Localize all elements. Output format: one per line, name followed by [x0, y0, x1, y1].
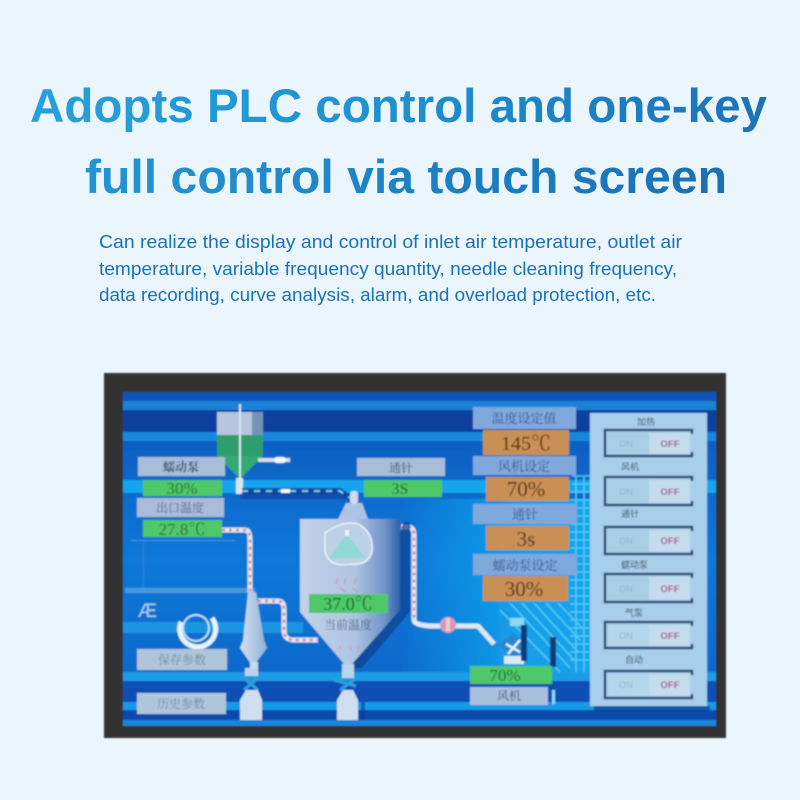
label: needle setting [473, 504, 577, 524]
button: history parameters: 历史参数 [157, 696, 205, 711]
title line 2: full control via touch screen [85, 150, 727, 203]
button: history parameters [137, 693, 226, 714]
label: peristaltic pump: 蠕动泵 [163, 459, 199, 474]
value: 30% [143, 479, 222, 498]
icon: collection containers [240, 664, 365, 720]
icon: AE logo ring: Æ [138, 601, 157, 622]
value: fan 70% [470, 666, 552, 685]
icon: AE logo ring [138, 601, 216, 647]
switch: needle: OFF [660, 536, 680, 547]
label: fan setpoint: 风机设定 [498, 459, 550, 474]
cyan hatch grid [500, 476, 590, 672]
description text block [99, 232, 682, 305]
switch: needle: ON [619, 536, 633, 546]
switch: needle: 通针 [621, 508, 639, 519]
switch: fan [605, 461, 692, 505]
pipes [222, 527, 494, 644]
value: 3S [364, 480, 442, 498]
label: needle setting: 通针 [512, 507, 538, 522]
icon: feed hopper [217, 404, 290, 494]
switch: pump: 蠕动泵 [621, 560, 648, 570]
switch: pump: OFF [660, 584, 680, 595]
switch: needle [605, 508, 692, 554]
switch: auto: OFF [660, 680, 680, 691]
switch: heating [605, 416, 692, 456]
label: chamber temperature: 当前温度 [324, 617, 372, 632]
label: pump setpoint: 蠕动泵设定 [492, 558, 558, 573]
value: 70%: 70% [507, 477, 545, 501]
value: 37.0C: 37.0℃ [323, 594, 373, 614]
label: temperature setpoint: 温度设定值 [491, 411, 557, 426]
icon: spray drying vessel [300, 491, 410, 668]
value: 30%: 30% [505, 577, 543, 601]
icon: fan and valve [440, 617, 556, 704]
label: fan setpoint [473, 456, 576, 475]
value: 70% [486, 477, 569, 501]
switch: auto [605, 654, 692, 698]
switch: fan: 风机 [621, 461, 639, 472]
description text block: temperature, variable frequency quantity, needle cleaning frequency, [99, 259, 677, 279]
value: 27.8C: 27.8℃ [159, 520, 205, 539]
screen bezel [104, 373, 726, 738]
switch: pump [605, 560, 692, 602]
switch: air: OFF [660, 631, 680, 642]
switch: fan: OFF [660, 487, 680, 498]
value: 37.0C [309, 594, 388, 614]
value: 30% [483, 576, 568, 601]
button: save parameters [137, 649, 227, 670]
switch: air: ON [619, 631, 633, 641]
switch: heating: 加热 [637, 416, 655, 427]
switch: heating: ON [619, 439, 633, 449]
icon: cyclone separator [240, 592, 267, 676]
label: needle: 通针 [389, 460, 413, 475]
panel: touch screen photo [104, 373, 726, 738]
label: outlet temperature: 出口温度 [156, 500, 204, 515]
value: 3s [486, 526, 569, 551]
left readouts [137, 457, 552, 714]
title [30, 79, 767, 203]
switch: fan: ON [619, 487, 633, 497]
label: fan: 风机 [497, 688, 521, 703]
value: 3S: 3S [392, 481, 408, 498]
switch: auto: 自动 [625, 654, 643, 665]
switch: heating: OFF [660, 439, 680, 450]
label: fan [470, 687, 548, 705]
panel: on/off switches [590, 413, 710, 711]
value: 145C [483, 430, 569, 455]
label: pump setpoint [473, 554, 577, 575]
title line 1: Adopts PLC control and one-key [30, 79, 767, 132]
value: 30%: 30% [166, 479, 198, 498]
description text block: data recording, curve analysis, alarm, and overload protection, etc. [99, 285, 656, 305]
label: temperature setpoint [473, 407, 576, 429]
switch: air: 气泵 [625, 607, 643, 618]
value: 27.8C [143, 520, 222, 539]
feed pipe [242, 489, 352, 500]
value: 145C: 145℃ [501, 433, 551, 455]
value: fan 70%: 70% [489, 666, 521, 685]
label: outlet temperature [137, 498, 224, 517]
screen background [123, 392, 716, 726]
button: save parameters: 保存参数 [158, 652, 206, 667]
switch: air [605, 607, 692, 648]
switch: pump: ON [619, 584, 633, 594]
description text block: Can realize the display and control of inlet air temperature, outlet air [99, 232, 682, 252]
switch: auto: ON [619, 680, 633, 690]
label: peristaltic pump [138, 457, 225, 476]
value: 3s: 3s [517, 527, 535, 551]
label: needle [357, 458, 445, 476]
setpoints column [473, 407, 577, 601]
